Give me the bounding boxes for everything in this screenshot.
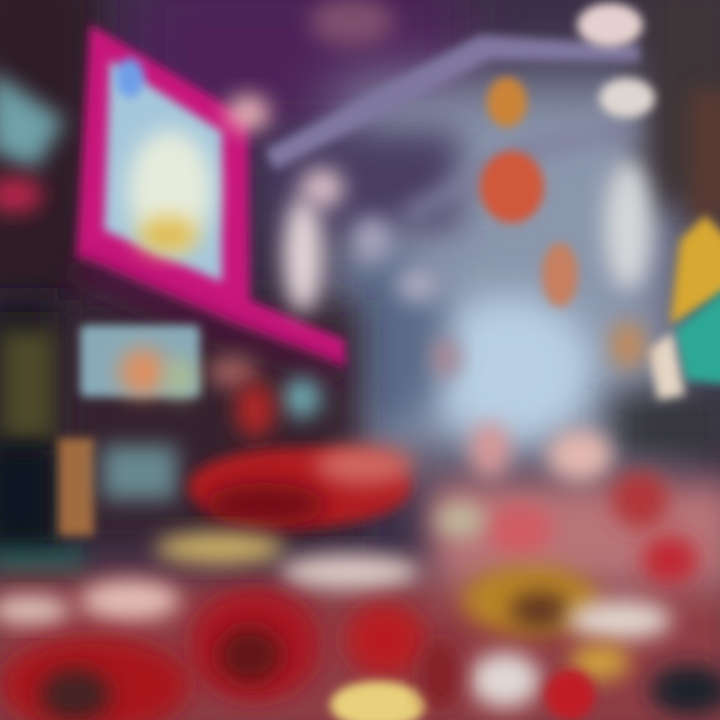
floating objects and lights	[283, 0, 655, 378]
lower storefront panels	[80, 325, 322, 500]
billboard: magenta framed screen	[70, 24, 345, 385]
left edge signs	[0, 70, 94, 580]
foreground crowd of red and white objects	[0, 422, 720, 720]
right edge figure with flag	[610, 90, 720, 400]
diagonal elevated rail	[265, 35, 640, 225]
red car shape	[188, 382, 415, 527]
